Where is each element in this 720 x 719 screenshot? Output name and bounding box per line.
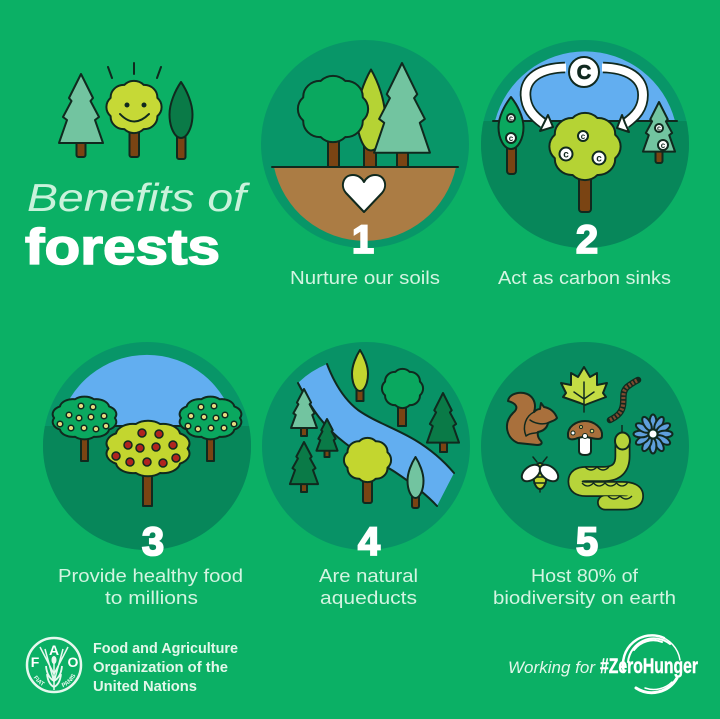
icon: snake: [576, 425, 636, 502]
panel: 4 natural aqueducts: Are natural: [319, 566, 418, 586]
panel: 2 carbon sinks: c: [596, 154, 602, 164]
title: Benefits of: [27, 177, 251, 220]
text: FAO name: Organization of the: [93, 659, 228, 676]
panel: 5 biodiversity: biodiversity on earth: [493, 588, 676, 608]
panel: 3 healthy food: to millions: [105, 588, 198, 608]
icon: bee: [519, 457, 561, 492]
title: forests: [25, 219, 220, 275]
panel: 5 biodiversity: 5: [576, 520, 598, 564]
panel: 2 carbon sinks: c: [509, 116, 513, 122]
icon: carbon circle: [569, 57, 599, 87]
panel: 2 carbon sinks: 2: [576, 218, 598, 262]
text: FAO name: Food and Agriculture: [93, 640, 238, 657]
panel: 4 natural aqueducts: aqueducts: [320, 588, 417, 608]
icon: squirrel: [507, 393, 557, 445]
panel: 5 biodiversity: [481, 342, 689, 608]
panel: 2 carbon sinks: c: [563, 150, 569, 160]
panel: 2 carbon sinks: [481, 40, 689, 288]
icon: mushroom: [568, 421, 602, 455]
logo: FAO emblem: [26, 636, 82, 694]
icon: worm: [610, 380, 638, 420]
logo: FAO emblem: FIAT: [34, 675, 45, 686]
icon: flower: [634, 414, 672, 454]
title: [25, 177, 251, 275]
tree: centre fruit tree: [107, 421, 189, 506]
icon: carbon circle: C: [577, 62, 591, 84]
logo: Working for #ZeroHunger: [508, 635, 698, 693]
panel: 1 nurture our soils: 1: [352, 218, 374, 262]
logo: FAO emblem: F: [31, 654, 40, 670]
logo: Working for #ZeroHunger: Working for: [508, 658, 596, 677]
panel: 4 natural aqueducts: [262, 342, 470, 608]
tree: right fruit tree: [180, 397, 241, 461]
panel: 1 nurture our soils: [261, 40, 469, 288]
logo: FAO emblem: PANIS: [62, 674, 76, 688]
panel: 2 carbon sinks: c: [509, 134, 514, 143]
icon: three happy trees: [59, 63, 192, 159]
text: FAO name: [93, 640, 238, 695]
icon: maple leaf: [561, 367, 607, 412]
panel: 2 carbon sinks: c: [657, 126, 661, 132]
panel: 3 healthy food: Provide healthy food: [58, 566, 243, 586]
panel: 2 carbon sinks: c: [661, 141, 666, 150]
panel: 1 nurture our soils: Nurture our soils: [290, 268, 440, 288]
panel: 5 biodiversity: Host 80% of: [531, 566, 639, 586]
panel: 3 healthy food: 3: [142, 520, 164, 564]
panel: 3 healthy food: [43, 342, 251, 608]
panel: 2 carbon sinks: Act as carbon sinks: [498, 268, 671, 288]
arrow: carbon to left: [525, 68, 566, 131]
logo: FAO emblem: A: [49, 642, 59, 658]
text: FAO name: United Nations: [93, 678, 197, 695]
arrow: carbon to right: [602, 68, 643, 132]
panel: 2 carbon sinks: c: [581, 132, 586, 141]
logo: FAO emblem: O: [68, 654, 79, 670]
panel: 4 natural aqueducts: 4: [358, 520, 381, 564]
tree: left fruit tree: [53, 397, 116, 461]
